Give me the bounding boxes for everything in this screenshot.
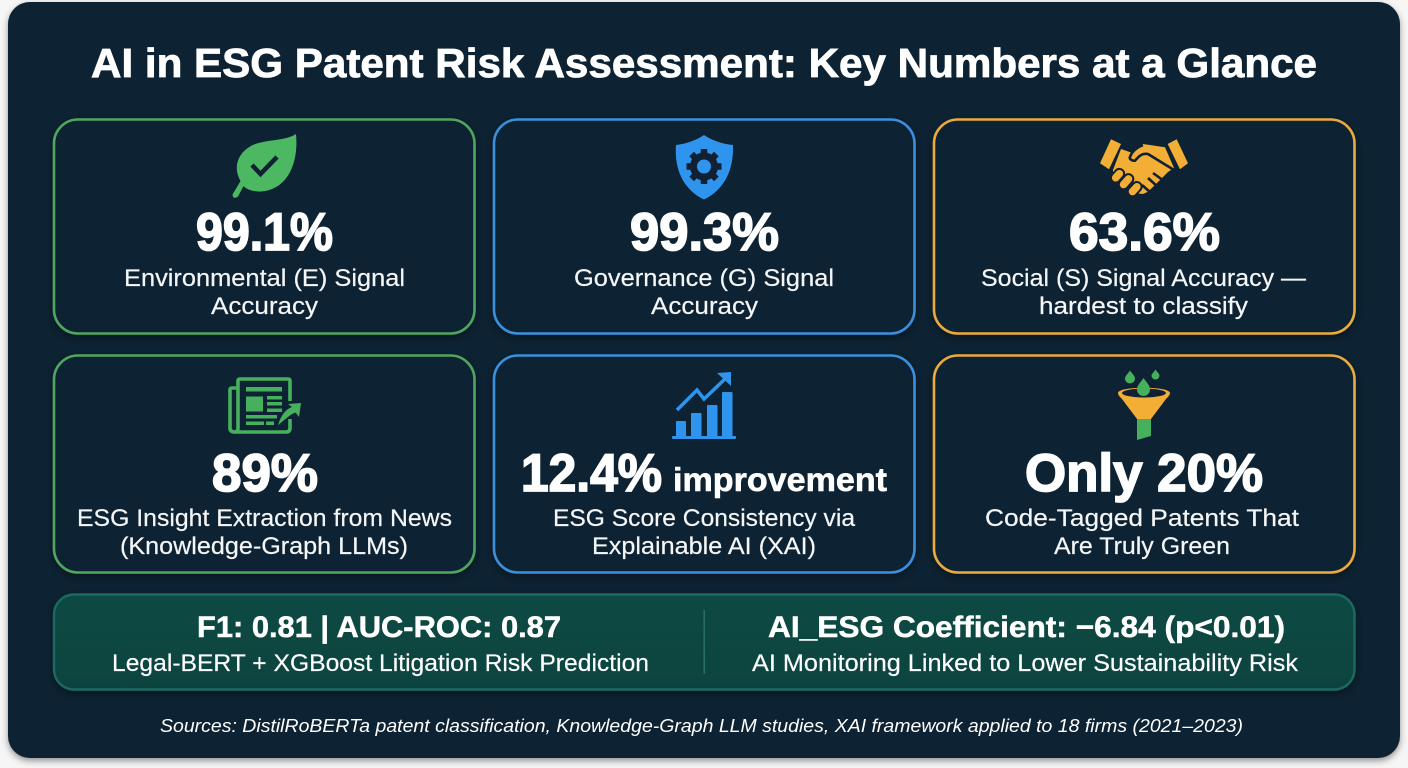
label: environmental signal accuracy: [124, 265, 405, 320]
panel: ESG score consistency: [494, 356, 914, 572]
label: environmental signal accuracy: Accuracy: [211, 293, 318, 320]
panel: governance signal accuracy: [494, 120, 914, 334]
metric: litigation risk prediction: [112, 611, 649, 677]
sources note: Sources: DistilRoBERTa patent classification, Knowledge-Graph LLM studies, XAI framework applied to 18 firms (2021–2023): [160, 715, 1243, 736]
label: governance signal accuracy: [574, 265, 834, 320]
label: ESG score consistency: [553, 505, 856, 560]
icon: shield with gear: [676, 135, 733, 200]
label: ESG insight extraction: [77, 505, 452, 560]
metric: AI ESG coefficient: AI Monitoring Linked to Lower Sustainability Risk: [752, 650, 1299, 677]
stat: 99.3%: 99.3%: [630, 203, 779, 262]
label: governance signal accuracy: Governance (G) Signal: [574, 265, 834, 292]
stat: 12.4% improvement: 12.4%: [521, 444, 662, 503]
title: AI in ESG Patent Risk Assessment: Key Numbers at a Glance: [91, 40, 1317, 86]
label: truly green patents: Code-Tagged Patents That: [985, 505, 1299, 532]
icon: leaf with check mark: [232, 134, 296, 198]
metric: litigation risk prediction: F1: 0.81 | AUC-ROC: 0.87: [197, 611, 561, 644]
panel: ESG insight extraction: [54, 356, 474, 572]
label: ESG score consistency: Explainable AI (XAI): [592, 533, 816, 560]
icon: funnel with drops: [1118, 370, 1170, 440]
stat: 12.4% improvement: [521, 444, 887, 503]
stat: 89%: 89%: [212, 444, 318, 503]
stat: only 20%: Only 20%: [1025, 444, 1263, 503]
panel: model metrics band: [54, 594, 1354, 690]
label: ESG insight extraction: ESG Insight Extraction from News: [77, 505, 452, 532]
label: social signal accuracy: [981, 265, 1306, 320]
stat: 12.4% improvement: improvement: [673, 461, 887, 498]
label: environmental signal accuracy: Environmental (E) Signal: [124, 265, 405, 292]
stat: 99.1%: 99.1%: [196, 203, 333, 262]
icon: rising bar chart: [672, 372, 736, 439]
label: truly green patents: [985, 505, 1299, 560]
label: social signal accuracy: hardest to classify: [1039, 293, 1248, 320]
label: ESG insight extraction: (Knowledge-Graph LLMs): [120, 533, 408, 560]
icon: newspaper with arrow: [230, 379, 301, 432]
metric: AI ESG coefficient: AI_ESG Coefficient: −6.84 (p<0.01): [768, 611, 1285, 644]
label: governance signal accuracy: Accuracy: [651, 293, 758, 320]
label: ESG score consistency: ESG Score Consistency via: [553, 505, 856, 532]
label: social signal accuracy: Social (S) Signal Accuracy —: [981, 265, 1306, 292]
icon: handshake: [1100, 139, 1188, 198]
label: truly green patents: Are Truly Green: [1054, 533, 1230, 560]
metric: litigation risk prediction: Legal-BERT + XGBoost Litigation Risk Prediction: [112, 650, 649, 677]
metric: AI ESG coefficient: [752, 611, 1299, 677]
panel: social signal accuracy: [934, 120, 1354, 334]
panel: environmental signal accuracy: [54, 120, 474, 334]
panel: truly green patents: [934, 356, 1354, 572]
stat: 63.6%: 63.6%: [1069, 203, 1220, 262]
